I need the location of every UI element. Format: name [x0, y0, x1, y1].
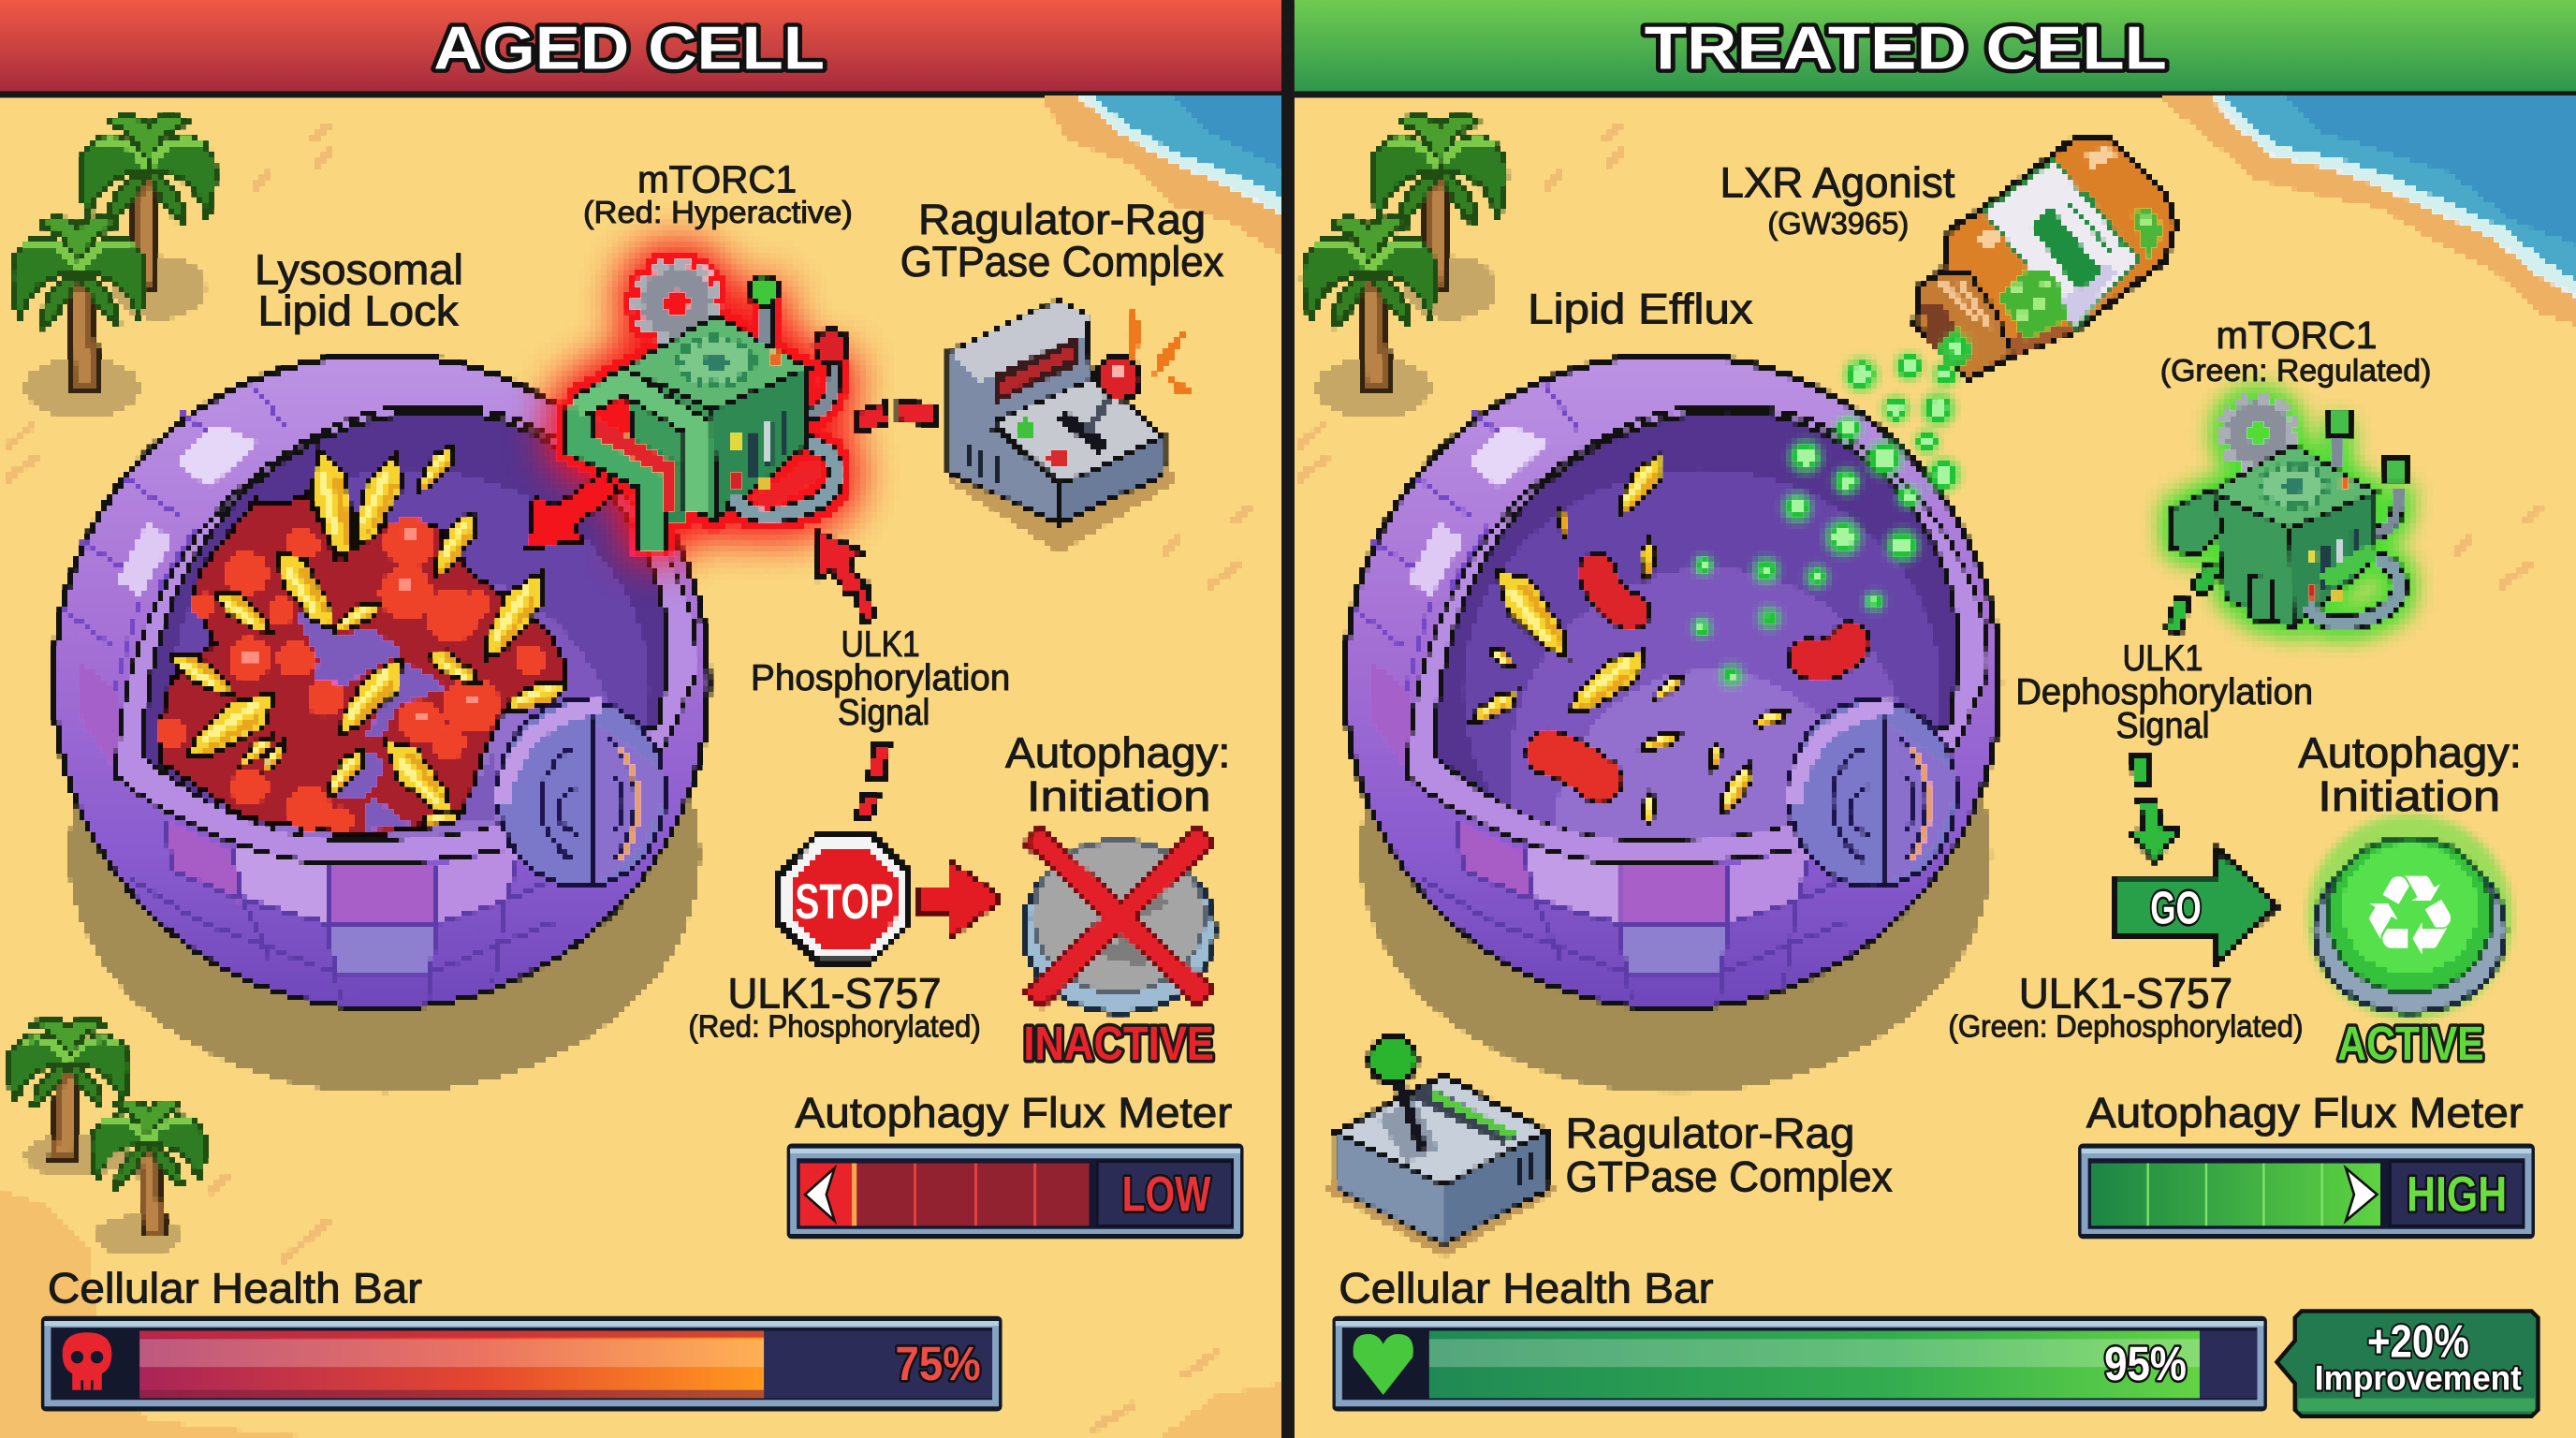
health bar: 75%	[41, 1316, 1003, 1412]
label: red hyperactive: (Red: Hyperactive)	[583, 196, 853, 230]
lysosome sphere, nearly clear	[1345, 355, 1999, 1093]
panel: aged cell	[0, 0, 1283, 1438]
95 percent: 95%	[2104, 1337, 2187, 1390]
beach and water	[1297, 97, 2576, 588]
labels and meters: treated cell	[1332, 14, 2538, 1416]
Improvement text: Improvement	[2315, 1359, 2522, 1398]
label: red phosphorylated: (Red: Phosphorylated)	[688, 1009, 981, 1044]
health bar: 95%	[1332, 1316, 2267, 1412]
label: Phosphorylation: Phosphorylation	[751, 658, 1010, 698]
icon: Ragulator-Rag lever box	[1325, 1036, 1556, 1257]
icon: skull	[63, 1332, 111, 1390]
label: Ragulator-Rag: Ragulator-Rag	[1566, 1109, 1854, 1157]
label: green dephosphorylated: (Green: Dephosphorylated)	[1948, 1009, 2304, 1044]
label: Lipid Efflux: Lipid Efflux	[1528, 286, 1753, 333]
beach and water	[0, 97, 1283, 1438]
75 percent: 75%	[895, 1337, 981, 1390]
title: treated cell: TREATED CELL	[1645, 14, 2167, 82]
label: ULK1: ULK1	[842, 624, 920, 665]
lysosome sphere packed with lipids	[54, 355, 708, 1093]
dashed signal: ULK1 phosphorylation arrow	[818, 533, 888, 818]
label: mTORC1: mTORC1	[637, 157, 797, 200]
status: active: ACTIVE	[2337, 1017, 2484, 1070]
label: flux meter: Autophagy Flux Meter	[2086, 1089, 2524, 1137]
STOP text: STOP	[795, 874, 894, 930]
icon: inactive autophagy button	[1023, 842, 1214, 1012]
label: Autophagy: Autophagy:	[2298, 729, 2522, 777]
label: Dephosphorylation: Dephosphorylation	[2015, 672, 2313, 712]
label: health bar: Cellular Health Bar	[48, 1265, 422, 1313]
header bar: aged cell	[0, 0, 1283, 92]
icon: GO arrow	[2115, 848, 2276, 964]
panel background and header	[1295, 0, 2576, 1438]
status: inactive: INACTIVE	[1023, 1017, 1214, 1070]
illustrated scene: aged cell	[0, 97, 1283, 1438]
icon: LXR agonist pill bottle	[1915, 137, 2175, 378]
icon: mTORC1 regulated machine	[2171, 399, 2407, 628]
icon: Ragulator-Rag console	[942, 302, 1193, 552]
labels and meters: aged cell	[41, 14, 1244, 1412]
label: green regulated: (Green: Regulated)	[2160, 354, 2431, 389]
green drug particles	[1692, 333, 1969, 687]
label: Lipid Lock: Lipid Lock	[258, 286, 459, 334]
dashed link: Ragulator to mTORC1	[855, 403, 936, 433]
icon: heart	[1354, 1334, 1413, 1395]
icon: recycle symbol: ♻	[2360, 852, 2460, 982]
label: GW3965: (GW3965)	[1767, 207, 1909, 242]
flux meter: high	[2078, 1143, 2535, 1239]
sparks	[1127, 305, 1193, 394]
label: LXR Agonist: LXR Agonist	[1720, 159, 1955, 207]
label: Initiation: Initiation	[2318, 772, 2500, 820]
label: GTPase Complex: GTPase Complex	[900, 238, 1224, 286]
label: Signal: Signal	[2115, 706, 2209, 746]
label: Lysosomal: Lysosomal	[255, 246, 463, 294]
LOW text: LOW	[1122, 1167, 1211, 1222]
panel background and header	[0, 0, 1283, 1438]
HIGH text: HIGH	[2407, 1167, 2507, 1222]
label: GTPase Complex: GTPase Complex	[1566, 1152, 1893, 1200]
icon: mTORC1 hyperactive machine	[578, 263, 848, 549]
divider between panels	[1281, 0, 1295, 1438]
icon: STOP sign	[777, 833, 912, 964]
dashed signal: ULK1 dephosphorylation arrow	[2129, 562, 2221, 861]
header bar: treated cell	[1295, 0, 2576, 92]
label: health bar: Cellular Health Bar	[1339, 1265, 1713, 1313]
label: Autophagy: Autophagy:	[1005, 729, 1230, 777]
label: flux meter: Autophagy Flux Meter	[795, 1089, 1232, 1137]
label: ULK1-S757: ULK1-S757	[2019, 970, 2232, 1018]
flux meter: low	[787, 1143, 1244, 1239]
+20% text: +20%	[2367, 1317, 2469, 1368]
label: Ragulator-Rag: Ragulator-Rag	[918, 196, 1206, 243]
palm trees, top left	[12, 117, 214, 418]
illustrated scene: treated cell	[1297, 97, 2576, 1257]
label: ULK1: ULK1	[2122, 638, 2203, 679]
title: aged cell: AGED CELL	[433, 14, 825, 82]
label: Signal: Signal	[838, 693, 929, 733]
label: ULK1-S757: ULK1-S757	[727, 970, 942, 1018]
yellow crystals	[165, 439, 573, 829]
arrow: mTORC1 into lysosome	[527, 475, 621, 549]
palm trees, bottom left	[9, 1020, 204, 1255]
label: mTORC1: mTORC1	[2216, 314, 2377, 357]
icon: active autophagy button	[2308, 814, 2511, 1019]
panel: treated cell	[1295, 0, 2576, 1438]
callout: +20% improvement	[2276, 1311, 2538, 1416]
GO text: GO	[2150, 883, 2202, 933]
palm trees, top left	[1304, 117, 1506, 418]
remaining lipids and crystals	[1466, 447, 1850, 825]
arrow: STOP to autophagy	[920, 861, 1003, 938]
label: Initiation: Initiation	[1027, 772, 1210, 820]
red lipid mass	[156, 492, 566, 836]
